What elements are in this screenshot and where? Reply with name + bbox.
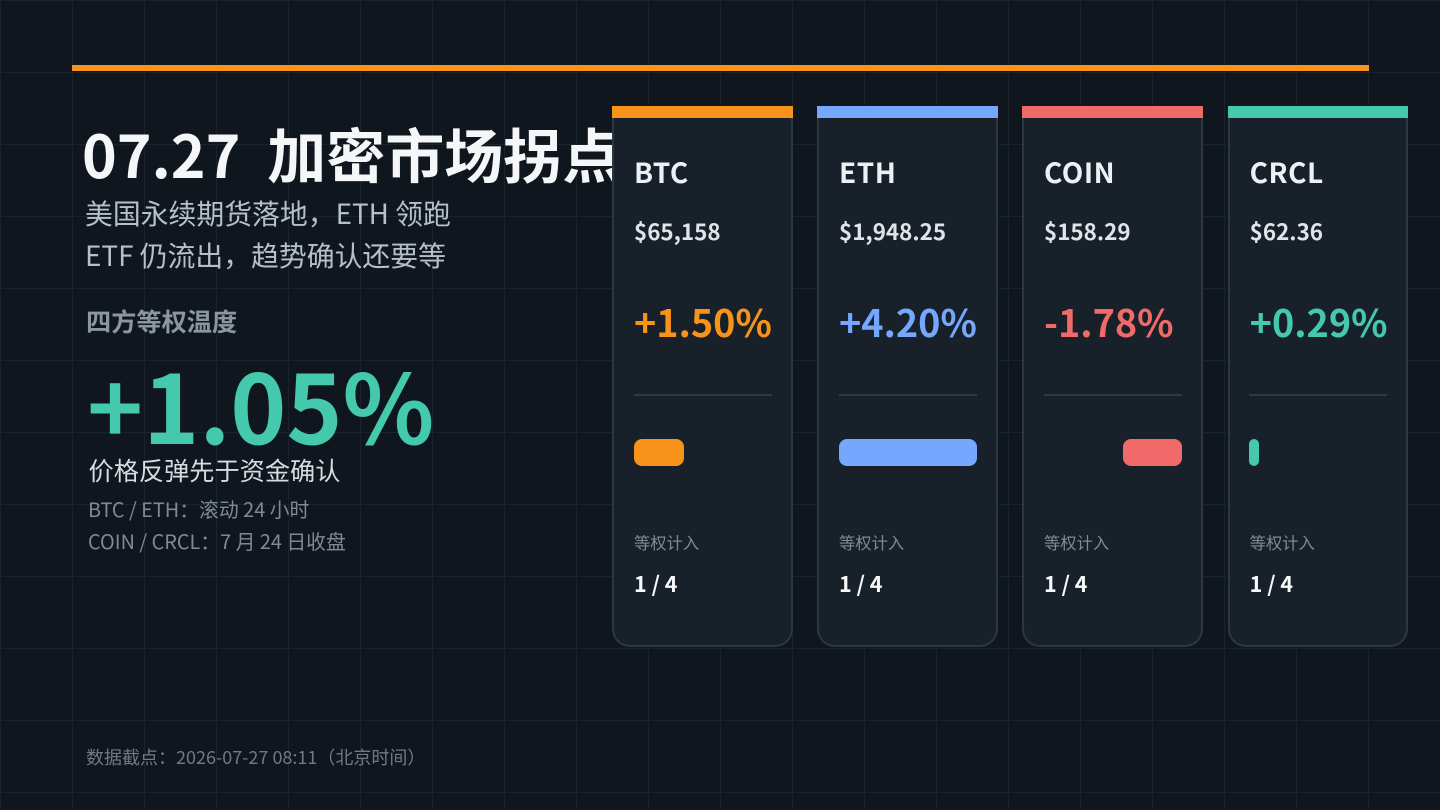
ETH change bar [839, 439, 976, 466]
CRCL price: $62.36 [1250, 215, 1323, 247]
BTC price: $65,158 [634, 215, 721, 247]
panel: COIN card [1022, 106, 1203, 647]
panel: BTC card [612, 106, 793, 647]
CRCL symbol: CRCL [1250, 152, 1324, 192]
ETH price: $1,948.25 [839, 215, 946, 247]
data notes: BTC / ETH：滚动 24 小时 COIN / CRCL：7 月 24 日收盘 [88, 494, 346, 555]
COIN symbol: COIN [1044, 152, 1115, 192]
ETH accent bar [817, 106, 998, 118]
CRCL change bar [1249, 439, 1259, 466]
COIN change bar [1123, 439, 1182, 466]
BTC weight value: 1 / 4 [634, 568, 677, 599]
section label: 四方等权温度 [86, 303, 237, 339]
COIN weight value: 1 / 4 [1044, 568, 1087, 599]
CRCL weight label: 等权计入 [1250, 530, 1315, 554]
BTC accent bar [612, 106, 793, 118]
BTC change: +1.50% [634, 293, 772, 348]
COIN price: $158.29 [1044, 215, 1131, 247]
COIN change: -1.78% [1044, 293, 1174, 348]
headline caption: 价格反弹先于资金确认 [88, 452, 340, 488]
panel: CRCL card [1228, 106, 1408, 647]
ETH weight label: 等权计入 [839, 530, 904, 554]
COIN weight label: 等权计入 [1044, 530, 1109, 554]
BTC weight label: 等权计入 [634, 530, 699, 554]
BTC change bar [634, 439, 684, 466]
COIN accent bar [1022, 106, 1203, 118]
ETH symbol: ETH [839, 152, 896, 192]
ETH change: +4.20% [839, 293, 977, 348]
BTC symbol: BTC [634, 152, 689, 192]
subtitle: 美国永续期货落地，ETH 领跑 ETF 仍流出，趋势确认还要等 [85, 193, 451, 275]
top accent bar [72, 65, 1369, 71]
ETH weight value: 1 / 4 [839, 568, 882, 599]
CRCL weight value: 1 / 4 [1250, 568, 1293, 599]
footer timestamp: 数据截点：2026-07-27 08:11（北京时间） [86, 744, 425, 770]
CRCL change: +0.29% [1250, 293, 1388, 348]
title: 07.27 加密市场拐点 [82, 110, 621, 195]
panel: ETH card [817, 106, 998, 647]
headline value: +1.05% [87, 335, 434, 472]
CRCL accent bar [1228, 106, 1408, 118]
